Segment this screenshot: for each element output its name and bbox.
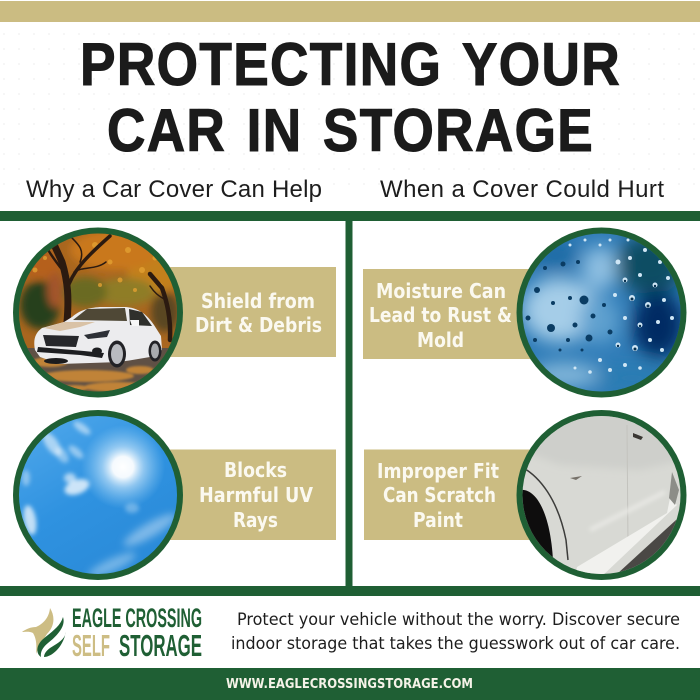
- label bar: moisture: [363, 269, 533, 359]
- icon: eagle with feathers: [22, 608, 66, 657]
- green frame: center divider: [346, 218, 352, 590]
- call to action text: indoor storage that takes the guesswork out of car care.: [231, 634, 680, 654]
- label text: moisture: Mold: [417, 328, 464, 352]
- heading: when a cover could hurt: When a Cover Could Hurt: [380, 176, 664, 203]
- title: CAR IN STORAGE: [107, 97, 594, 164]
- panel: shield from dirt and debris: [13, 228, 336, 398]
- logo text: self storage: [72, 628, 202, 663]
- label text: scratch: Can Scratch: [383, 483, 496, 507]
- green frame: bottom rule: [0, 586, 700, 596]
- label text: moisture: Moisture Can: [376, 279, 506, 303]
- title: PROTECTING YOUR: [80, 31, 621, 98]
- label text: moisture: [369, 279, 512, 352]
- panel: blocks harmful uv rays: [13, 410, 336, 581]
- label bar: shield: [170, 267, 336, 357]
- green frame: top rule: [0, 211, 700, 221]
- label text: scratch: Improper Fit: [377, 459, 499, 483]
- label text: uv: Blocks: [224, 458, 287, 482]
- label text: moisture: Lead to Rust &: [369, 303, 512, 327]
- label bar: uv: [170, 450, 336, 540]
- call to action text: Protect your vehicle without the worry. Discover secure: [237, 610, 680, 630]
- label text: shield: [195, 289, 322, 337]
- label text: shield: Shield from: [201, 289, 315, 313]
- logo text: self storage: STORAGE: [119, 628, 202, 663]
- background dot texture: [0, 24, 700, 189]
- logo text: self storage: SELF: [72, 628, 110, 663]
- photo: white car under autumn trees: [13, 228, 183, 398]
- label text: uv: Harmful UV: [199, 483, 313, 507]
- label text: scratch: [377, 459, 499, 532]
- label text: shield: Dirt & Debris: [195, 313, 322, 337]
- title: [80, 31, 621, 164]
- label text: scratch: Paint: [413, 508, 463, 532]
- panel: moisture can lead to rust and mold: [363, 228, 686, 398]
- label text: uv: Rays: [233, 508, 278, 532]
- logo text: eagle crossing: EAGLE CROSSING: [72, 603, 202, 633]
- footer band with website: [0, 668, 700, 700]
- label text: uv: [199, 458, 313, 532]
- photo: scratched white car door: [516, 410, 686, 580]
- logo: eagle crossing self storage: [22, 603, 202, 663]
- photo: water droplets on glass: [516, 228, 686, 398]
- top gold band: [0, 1, 700, 22]
- label bar: scratch: [364, 450, 534, 540]
- panel: improper fit can scratch paint: [364, 410, 686, 580]
- photo: sunny blue sky: [13, 410, 183, 581]
- footer band with website: WWW.EAGLECROSSINGSTORAGE.COM: [226, 677, 473, 692]
- call to action text: [231, 610, 680, 654]
- heading: why a car cover can help: Why a Car Cover Can Help: [26, 176, 322, 203]
